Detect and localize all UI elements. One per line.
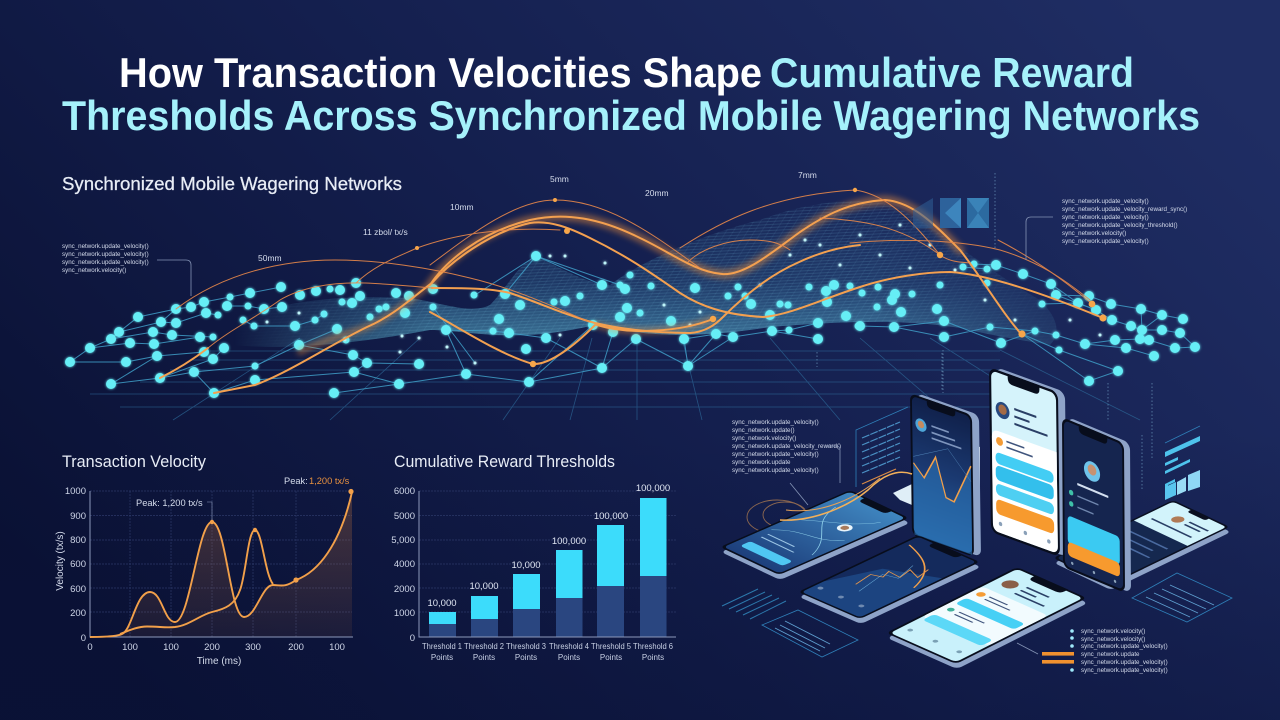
bar value labels xyxy=(427,483,670,609)
code list with markers: sync_network.update_velocity() xyxy=(1081,659,1168,666)
screen light streak xyxy=(780,472,912,520)
code callout: top right xyxy=(1026,198,1187,260)
phone: standing chart phone xyxy=(910,393,981,557)
panel: lower right card xyxy=(1132,573,1232,622)
phone: flat light rewards phone xyxy=(886,567,1088,669)
medium nodes xyxy=(213,264,1059,366)
distance labels: 10mm xyxy=(450,202,474,212)
line chart: transaction velocity: Velocity (tx/s) xyxy=(55,531,66,591)
phone: small light phone behind xyxy=(893,445,980,505)
x tick labels: 100 xyxy=(122,642,138,653)
phone: flat dark-and-light rear right xyxy=(1053,500,1231,590)
stream markers xyxy=(415,188,1107,367)
y tick labels: 600 xyxy=(70,559,86,570)
large nodes xyxy=(70,256,1195,393)
bar value labels: 10,000 xyxy=(511,560,541,571)
bullets xyxy=(1070,629,1074,672)
code callout: top right: sync_network.update_velocity_reward_sync() xyxy=(1062,206,1187,213)
thin arcs xyxy=(176,190,1092,348)
lower segments xyxy=(429,576,666,637)
y tick labels: 600 xyxy=(70,584,86,595)
threshold labels: Points xyxy=(515,653,537,662)
code callout: top left: sync_network.update_velocity() xyxy=(62,259,149,266)
threshold labels: Threshold 3 xyxy=(506,642,547,651)
orange markers xyxy=(1042,652,1074,664)
grid xyxy=(90,491,352,637)
orange velocity streams xyxy=(160,190,1103,393)
distance labels: 5mm xyxy=(550,174,569,184)
bar chart: cumulative reward thresholds xyxy=(391,483,676,662)
y tick labels: 5,000 xyxy=(391,535,415,546)
threshold labels xyxy=(422,642,674,662)
x tick labels: 0 xyxy=(87,642,93,653)
y tick labels: 0 xyxy=(81,633,86,644)
stream glow xyxy=(300,200,960,352)
network nodes xyxy=(70,225,1195,393)
code list with markers xyxy=(1017,628,1168,674)
bar value labels: 10,000 xyxy=(469,581,499,592)
code callout: phones left: sync_network.update xyxy=(732,459,791,466)
threshold labels: Points xyxy=(558,653,580,662)
x tick labels xyxy=(87,642,345,653)
code callout: phones left: sync_network.update() xyxy=(732,427,795,434)
threshold labels: Points xyxy=(473,653,495,662)
phone: flat dark chart phone xyxy=(798,535,981,624)
y tick labels: 2000 xyxy=(394,584,415,595)
heading: velocity chart: Transaction Velocity xyxy=(62,453,207,471)
threshold labels: Points xyxy=(642,653,664,662)
title: How Transaction Velocities Shape xyxy=(119,49,762,96)
code callout: phones left xyxy=(732,419,841,505)
threshold labels: Threshold 2 xyxy=(464,642,505,651)
distance labels: 11 zbol/ tx/s xyxy=(363,227,408,237)
peak markers xyxy=(210,489,354,583)
y tick labels: 900 xyxy=(70,511,86,522)
bar value labels: 100,000 xyxy=(552,536,586,547)
code callout: phones left: sync_network.update_velocity() xyxy=(732,451,819,458)
grid xyxy=(419,491,676,612)
velocity curves xyxy=(90,492,352,637)
threshold labels: Points xyxy=(431,653,453,662)
y tick labels: 1000 xyxy=(394,608,415,619)
title xyxy=(62,49,1200,139)
peak annotation: Peak: 1,200 tx/s xyxy=(136,498,203,508)
distance labels: 20mm xyxy=(645,188,669,198)
y tick labels xyxy=(65,486,86,644)
phone: flat network map phone xyxy=(720,472,912,580)
code callout: top right: sync_network.update_velocity() xyxy=(1062,214,1149,221)
axis titles: Time (ms) xyxy=(197,656,241,667)
distance labels xyxy=(258,170,817,263)
code list with markers: sync_network.update_velocity() xyxy=(1081,667,1168,674)
arcs around flat phone xyxy=(747,500,807,534)
area under curve xyxy=(90,492,352,637)
x tick labels: 300 xyxy=(245,642,261,653)
code callout: phones left: sync_network.velocity() xyxy=(732,435,796,442)
code callout: top right: sync_network.update_velocity_threshold() xyxy=(1062,222,1178,229)
title: Cumulative Reward xyxy=(770,49,1134,96)
code callout: phones left: sync_network.update_velocity() xyxy=(732,419,819,426)
code callout: top left: sync_network.velocity() xyxy=(62,267,126,274)
code callout: top right: sync_network.velocity() xyxy=(1062,230,1126,237)
y tick labels: 6000 xyxy=(394,486,415,497)
floor grid xyxy=(90,338,1140,420)
x tick labels: 200 xyxy=(288,642,304,653)
threshold labels: Threshold 4 xyxy=(549,642,590,651)
code callout: top left: sync_network.update_velocity() xyxy=(62,243,149,250)
network edges xyxy=(70,256,1195,393)
title: Thresholds Across Synchronized Mobile Wagering Networks xyxy=(62,92,1200,139)
code callout: top right: sync_network.update_velocity() xyxy=(1062,238,1149,245)
code list with markers: sync_network.update xyxy=(1081,651,1140,658)
threshold labels: Threshold 6 xyxy=(633,642,674,651)
peak annotation: Peak: xyxy=(284,476,308,486)
dotted guide lines xyxy=(817,173,1152,490)
peak annotation xyxy=(136,476,350,520)
code callout: top left xyxy=(62,243,191,296)
code list with markers: sync_network.velocity() xyxy=(1081,636,1145,643)
code list with markers: sync_network.update_velocity() xyxy=(1081,643,1168,650)
code list with markers: sync_network.velocity() xyxy=(1081,628,1145,635)
y tick labels: 0 xyxy=(410,633,415,644)
x tick labels: 100 xyxy=(163,642,179,653)
y tick labels xyxy=(391,486,415,644)
distance labels: 7mm xyxy=(798,170,817,180)
small white dots xyxy=(267,225,1100,363)
network mesh band xyxy=(233,201,1057,347)
code callout: phones left: sync_network.update_velocity() xyxy=(732,467,819,474)
phone: standing dark profile phone xyxy=(1062,417,1131,593)
peak annotation: 1,200 tx/s xyxy=(309,476,350,486)
threshold labels: Threshold 1 xyxy=(422,642,463,651)
y tick labels: 4000 xyxy=(394,559,415,570)
code callout: phones left: sync_network.update_velocity_reward() xyxy=(732,443,841,450)
bar value labels: 100,000 xyxy=(594,511,628,522)
bar value labels: 100,000 xyxy=(636,483,670,494)
y tick labels: 1000 xyxy=(65,486,86,497)
distance labels: 50mm xyxy=(258,253,282,263)
panel: bar tiles right xyxy=(1165,426,1200,443)
axes xyxy=(90,491,353,637)
phone: standing light app phone xyxy=(989,367,1067,557)
y tick labels: 800 xyxy=(70,535,86,546)
panel: text card behind phones xyxy=(856,407,908,487)
threshold labels: Points xyxy=(600,653,622,662)
threshold labels: Threshold 5 xyxy=(591,642,632,651)
axes xyxy=(419,491,676,637)
floating data panels xyxy=(722,407,1232,657)
thick streams xyxy=(160,200,1103,393)
upper segments xyxy=(429,498,666,624)
bar value labels: 10,000 xyxy=(427,598,457,609)
panel: hatch tile xyxy=(722,589,786,619)
y tick labels: 200 xyxy=(70,608,86,619)
x tick labels: 100 xyxy=(329,642,345,653)
decorative data tiles xyxy=(913,198,989,228)
heading: rewards chart: Cumulative Reward Thresholds xyxy=(394,453,615,471)
panel: lower left card xyxy=(762,610,858,657)
code callout: top left: sync_network.update_velocity() xyxy=(62,251,149,258)
x tick labels: 200 xyxy=(204,642,220,653)
y tick labels: 5000 xyxy=(394,511,415,522)
line chart: transaction velocity xyxy=(55,476,354,667)
code callout: top right: sync_network.update_velocity() xyxy=(1062,198,1149,205)
heading: network section: Synchronized Mobile Wagering Networks xyxy=(62,174,402,194)
